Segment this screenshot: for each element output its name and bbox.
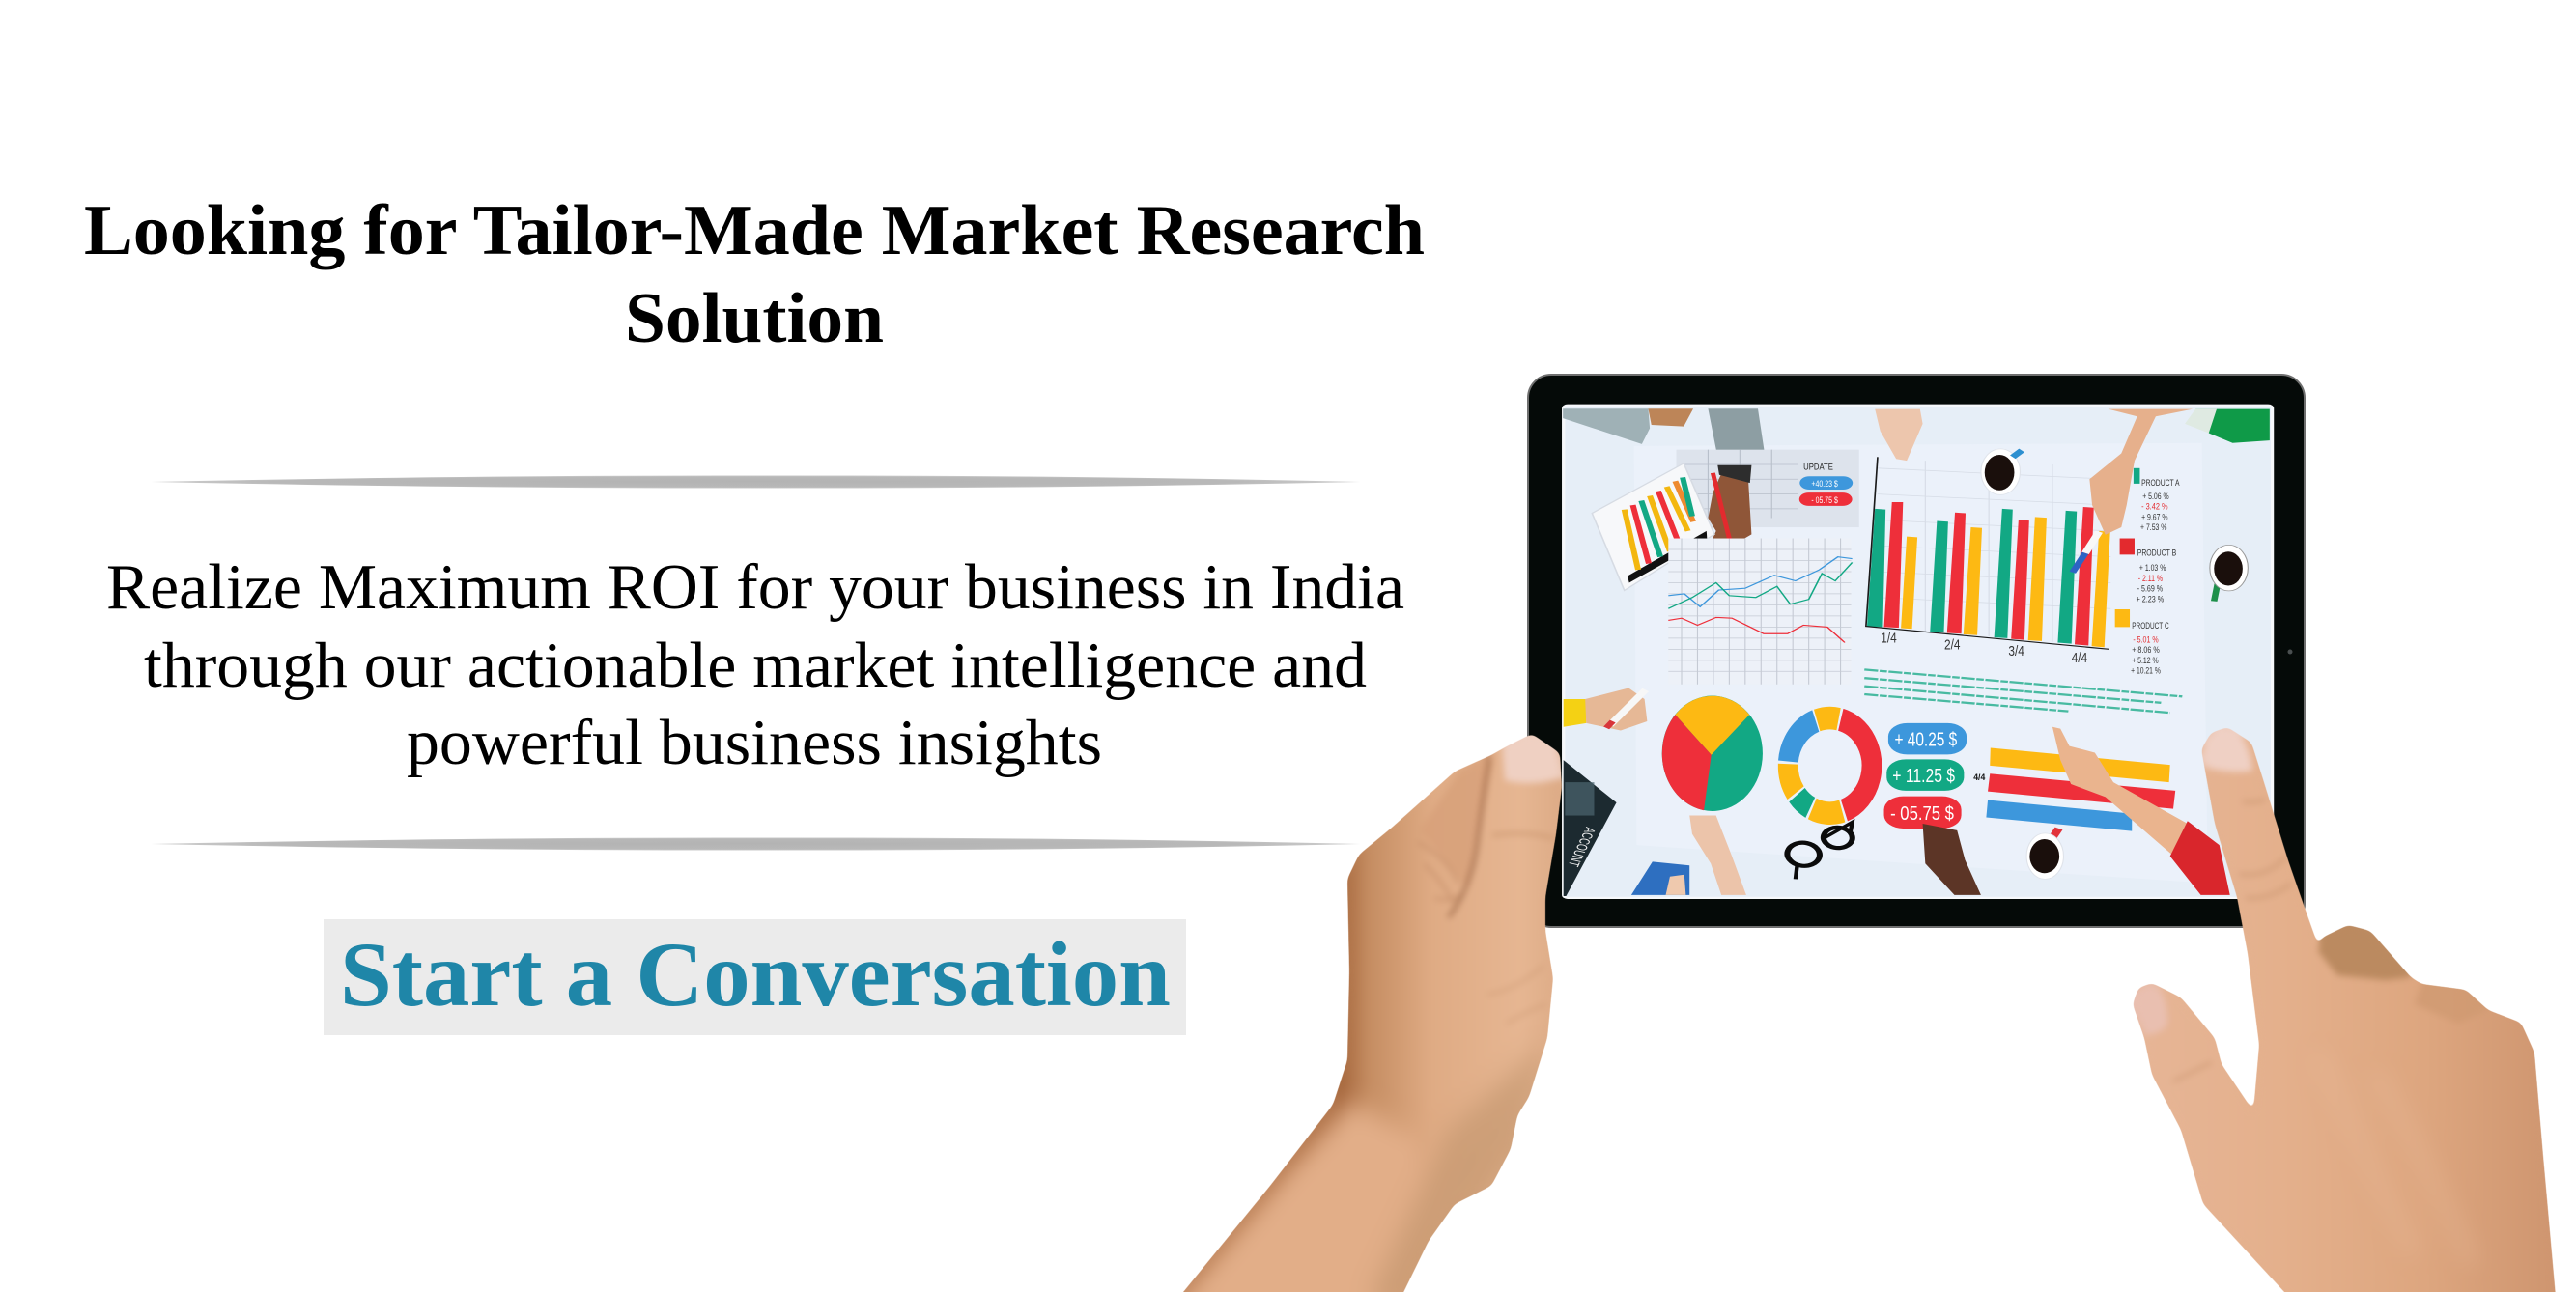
bar chart: 3/4 [2008, 643, 2024, 659]
coffee cup 1 [1981, 449, 2022, 494]
legend product figures: + 2.23 % [2137, 595, 2164, 604]
update panel: - 05.75 $ [1811, 496, 1838, 505]
camera dot [2287, 649, 2293, 655]
right hand touching tablet [2133, 727, 2558, 1292]
thumb crease [1492, 833, 1553, 838]
hand with watch [1708, 465, 1751, 548]
horizontal bars [1973, 748, 2175, 831]
horizontal bars: 4/4 [1973, 773, 1986, 782]
legend product figures: PRODUCT C [2132, 622, 2169, 631]
legend product figures: + 10.21 % [2131, 666, 2161, 676]
value pills: - 05.75 $ [1890, 803, 1954, 825]
coffee cup 3 [2026, 829, 2063, 879]
ring knuckle shade [2419, 983, 2485, 1014]
middle finger in shadow [2318, 925, 2411, 980]
lower forearm tone [1183, 1094, 1420, 1292]
hands at the top [1875, 409, 2193, 535]
green paragraph lines [1864, 669, 2182, 713]
legend product figures: + 1.03 % [2139, 564, 2166, 574]
donut chart [1771, 699, 1888, 832]
calculator [1564, 760, 1617, 896]
bar chart: 2/4 [1944, 636, 1961, 653]
value pills [1884, 723, 1967, 829]
blue cloth person [1631, 861, 1689, 895]
thumb nail [2133, 985, 2167, 1035]
tendon highlights [2318, 1053, 2473, 1265]
calculator: ACCOUNT [1565, 826, 1599, 868]
update panel: +40.23 $ [1811, 480, 1838, 489]
left hand holding tablet [1162, 734, 1562, 1292]
legend product figures: + 5.06 % [2142, 492, 2169, 501]
update panel [1677, 450, 1859, 527]
yellow sleeve hand and marker [1564, 688, 1647, 731]
legend product figures: + 9.67 % [2141, 513, 2168, 522]
legend product figures: - 5.69 % [2137, 584, 2163, 594]
people at top left [1563, 408, 1765, 465]
body text: Realize Maximum ROI for your business in India [106, 551, 1404, 623]
title: Looking for Tailor-Made Market Research [84, 191, 1425, 270]
body text: through our actionable market intelligence and [144, 630, 1367, 701]
body text [106, 551, 1404, 778]
small tablet with bars [1592, 463, 1714, 590]
index finger behind thumb [1431, 753, 1495, 879]
glasses [1781, 822, 1857, 879]
pie chart [1662, 696, 1763, 811]
title: Solution [625, 279, 884, 358]
finger knuckle creases [2239, 800, 2291, 898]
pen in hand [2085, 532, 2099, 553]
divider top [151, 475, 1360, 489]
legend product figures: - 2.11 % [2138, 575, 2163, 583]
legend product figures [2115, 468, 2180, 676]
divider bottom [151, 837, 1360, 851]
line chart [1668, 539, 1853, 685]
red pen [1713, 473, 1734, 555]
thumb valley line [1449, 758, 1489, 917]
button: start a conversation: Start a Conversation [340, 923, 1171, 1025]
legend product figures: PRODUCT A [2141, 479, 2180, 488]
update panel: UPDATE [1803, 463, 1833, 472]
value pills: + 40.25 $ [1895, 730, 1957, 750]
pointing arm with red sleeve [2052, 727, 2230, 895]
legend product figures: - 3.42 % [2141, 502, 2168, 512]
legend product figures: + 8.06 % [2132, 646, 2160, 656]
bar chart: 4/4 [2072, 650, 2087, 665]
legend product figures: - 5.01 % [2133, 635, 2159, 645]
light hand [1689, 816, 1746, 895]
bar chart [1866, 457, 2110, 665]
title [84, 191, 1425, 358]
index fingernail [2203, 728, 2252, 772]
bar chart: 1/4 [1881, 630, 1897, 646]
thumbnail [1503, 735, 1561, 783]
tablet [1528, 375, 2305, 927]
dark hand [1923, 824, 1981, 895]
knuckle creases [1443, 892, 1457, 902]
legend product figures: + 5.12 % [2132, 657, 2159, 665]
tablet screen dashboard [1563, 406, 2273, 898]
value pills: + 11.25 $ [1892, 766, 1955, 787]
legend product figures: + 7.53 % [2140, 523, 2166, 533]
green cloth [2195, 409, 2270, 443]
body text: powerful business insights [407, 707, 1102, 778]
legend product figures: PRODUCT B [2137, 548, 2176, 558]
coffee cup 2 [2210, 545, 2248, 602]
